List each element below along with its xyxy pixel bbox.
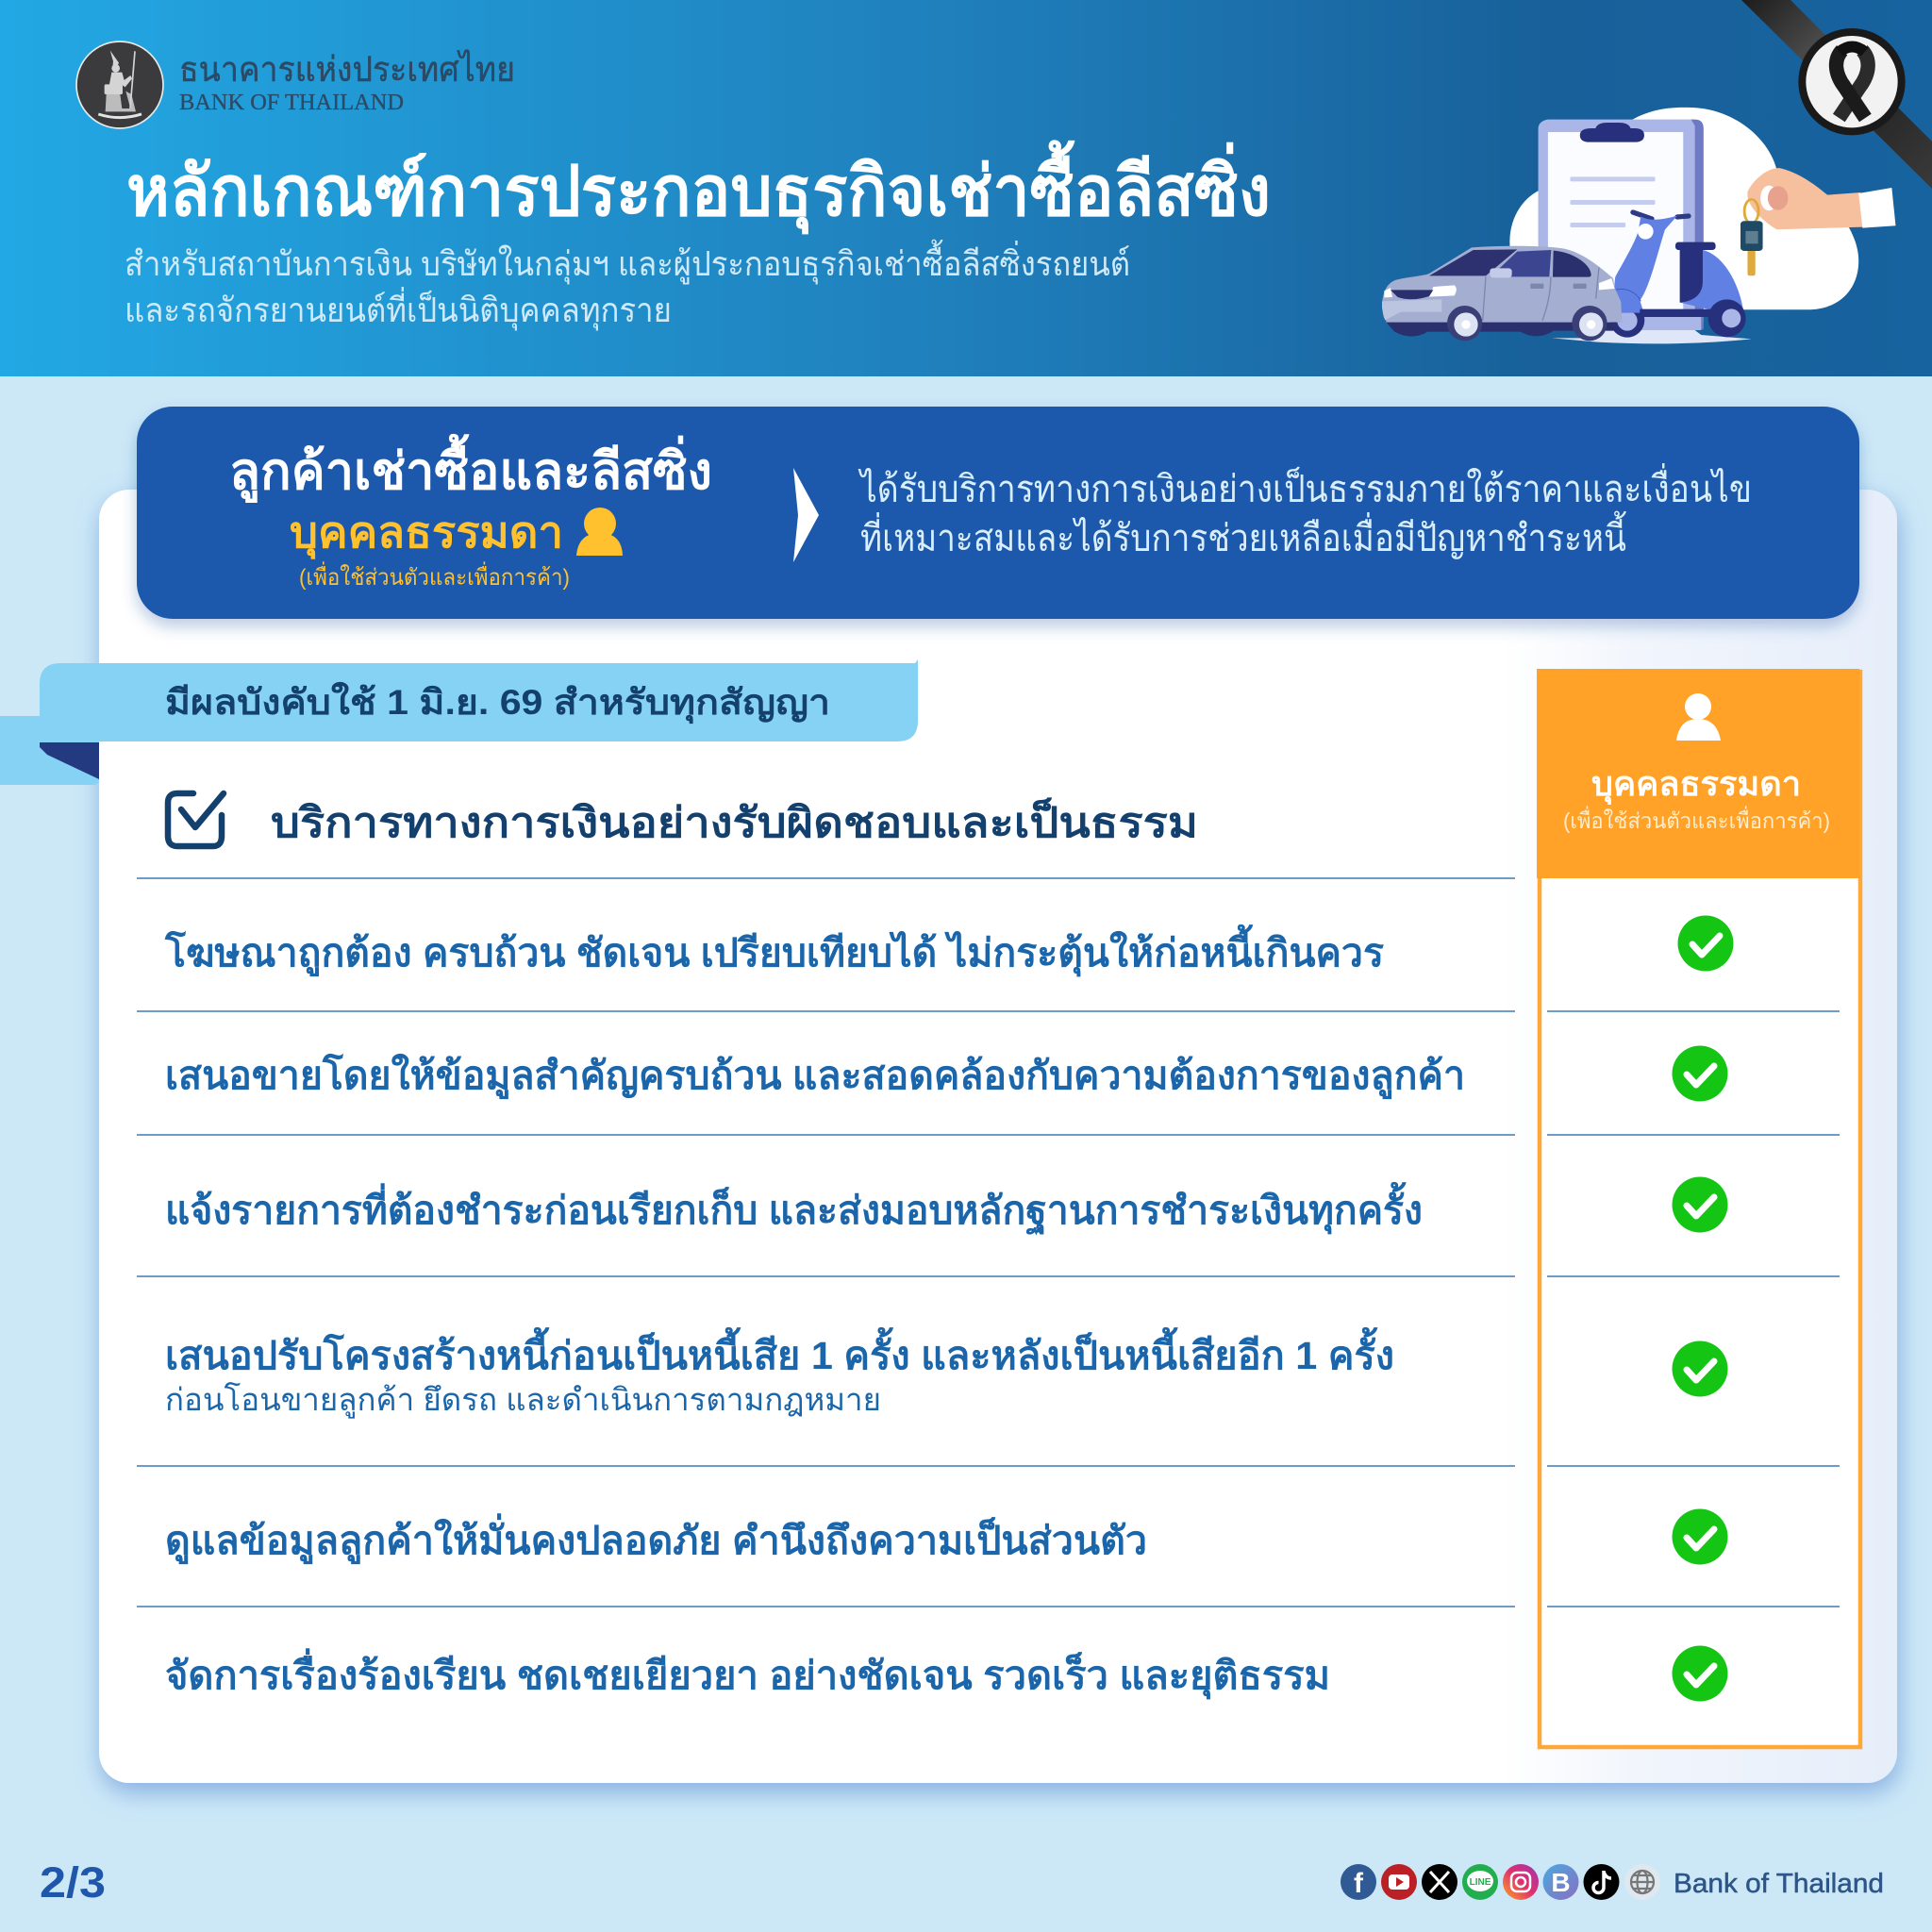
icon: tiktok (1583, 1864, 1619, 1900)
icon: line: LINE (1470, 1877, 1491, 1888)
banner: customer type: ที่เหมาะสมและได้รับการช่วยเหลือเมื่อมีปัญหาชำระหนี้ (860, 510, 1626, 559)
arrow (793, 468, 819, 562)
icon: x (1422, 1864, 1457, 1900)
social icons (1341, 1864, 1660, 1900)
check 6 (1672, 1645, 1728, 1702)
banner subtitle: บุคคลธรรมดา (290, 508, 563, 559)
banner description: ได้รับบริการทางการเงินอย่างเป็นธรรมภายใต้ราคาและเงื่อนไข (858, 463, 1752, 510)
main title: หลักเกณฑ์การประกอบธุรกิจเช่าซื้อลีสซิ่ง (126, 140, 1271, 235)
icon: facebook (1341, 1864, 1376, 1900)
clipboard (1539, 120, 1704, 330)
banner: customer type (137, 407, 1859, 619)
mourning sash and ribbon badge (1741, 0, 1932, 189)
footer label: Bank of Thailand (1674, 1869, 1884, 1899)
scooter (1610, 212, 1746, 338)
icon: line (1462, 1864, 1498, 1900)
icon: person white (1676, 693, 1721, 741)
icon: facebook: f (1354, 1868, 1364, 1899)
column note: (เพื่อใช้ส่วนตัวและเพื่อการค้า) (1563, 806, 1830, 833)
icon: person (576, 508, 623, 556)
subtitle line 1: สำหรับสถาบันการเงิน บริษัทในกลุ่มฯ และผู้ประกอบธุรกิจเช่าซื้อลีสซิ่งรถยนต์ (125, 239, 1130, 285)
header band (0, 0, 1932, 376)
hand holding key (1740, 168, 1895, 275)
organisation name English: BANK OF THAILAND (179, 91, 404, 115)
row 3: แจ้งรายการที่ต้องชำระก่อนเรียกเก็บ และส่งมอบหลักฐานการชำระเงินทุกครั้ง (165, 1182, 1423, 1236)
row 2: เสนอขายโดยให้ข้อมูลสำคัญครบถ้วน และสอดคล้องกับความต้องการของลูกค้า (165, 1053, 1465, 1100)
column: individual customer (1537, 669, 1860, 1747)
icon: checkbox (168, 793, 224, 846)
icon: globe (1624, 1864, 1660, 1900)
row 1: โฆษณาถูกต้อง ครบถ้วน ชัดเจน เปรียบเทียบได้ ไม่กระตุ้นให้ก่อหนี้เกินควร (164, 924, 1384, 977)
car (1382, 246, 1622, 341)
logo: Bank of Thailand seal (76, 42, 163, 128)
subtitle line 2: และรถจักรยานยนต์ที่เป็นนิติบุคคลทุกราย (125, 287, 672, 331)
check 1 (1677, 915, 1734, 972)
check 5 (1672, 1509, 1728, 1564)
icon: youtube (1381, 1864, 1417, 1900)
tag text: มีผลบังคับใช้ 1 มิ.ย. 69 สำหรับทุกสัญญา (165, 681, 830, 724)
effective date tag (0, 659, 918, 785)
icon: blockdit (1543, 1864, 1579, 1900)
organisation name Thai: ธนาคารแห่งประเทศไทย (179, 49, 515, 89)
cloud (1509, 108, 1858, 309)
row 5: ดูแลข้อมูลลูกค้าให้มั่นคงปลอดภัย คำนึงถึงความเป็นส่วนตัว (165, 1513, 1147, 1565)
banner title: ลูกค้าเช่าซื้อและลีสซิ่ง (229, 434, 712, 503)
page number: 2/3 (40, 1858, 106, 1907)
column title: บุคคลธรรมดา (1591, 764, 1801, 806)
ground shadow (1552, 330, 1752, 343)
check 2 (1672, 1045, 1728, 1102)
row 4: เสนอปรับโครงสร้างหนี้ก่อนเป็นหนี้เสีย 1 ครั้ง และหลังเป็นหนี้เสียอีก 1 ครั้ง (165, 1327, 1394, 1377)
banner note: (เพื่อใช้ส่วนตัวและเพื่อการค้า) (299, 561, 570, 591)
icon: instagram (1503, 1864, 1539, 1900)
row 4 note: ก่อนโอนขายลูกค้า ยึดรถ และดำเนินการตามกฎหมาย (165, 1382, 881, 1419)
check 3 (1672, 1177, 1728, 1232)
divider lines (137, 878, 1840, 1607)
illustration: car, scooter, contract and key (1382, 108, 1895, 343)
section heading: บริการทางการเงินอย่างรับผิดชอบและเป็นธรรม (271, 797, 1198, 846)
icon: blockdit: B (1551, 1868, 1571, 1897)
row 6: จัดการเรื่องร้องเรียน ชดเชยเยียวยา อย่างชัดเจน รวดเร็ว และยุติธรรม (165, 1648, 1330, 1700)
main white card (99, 490, 1897, 1783)
check 4 (1672, 1341, 1728, 1396)
